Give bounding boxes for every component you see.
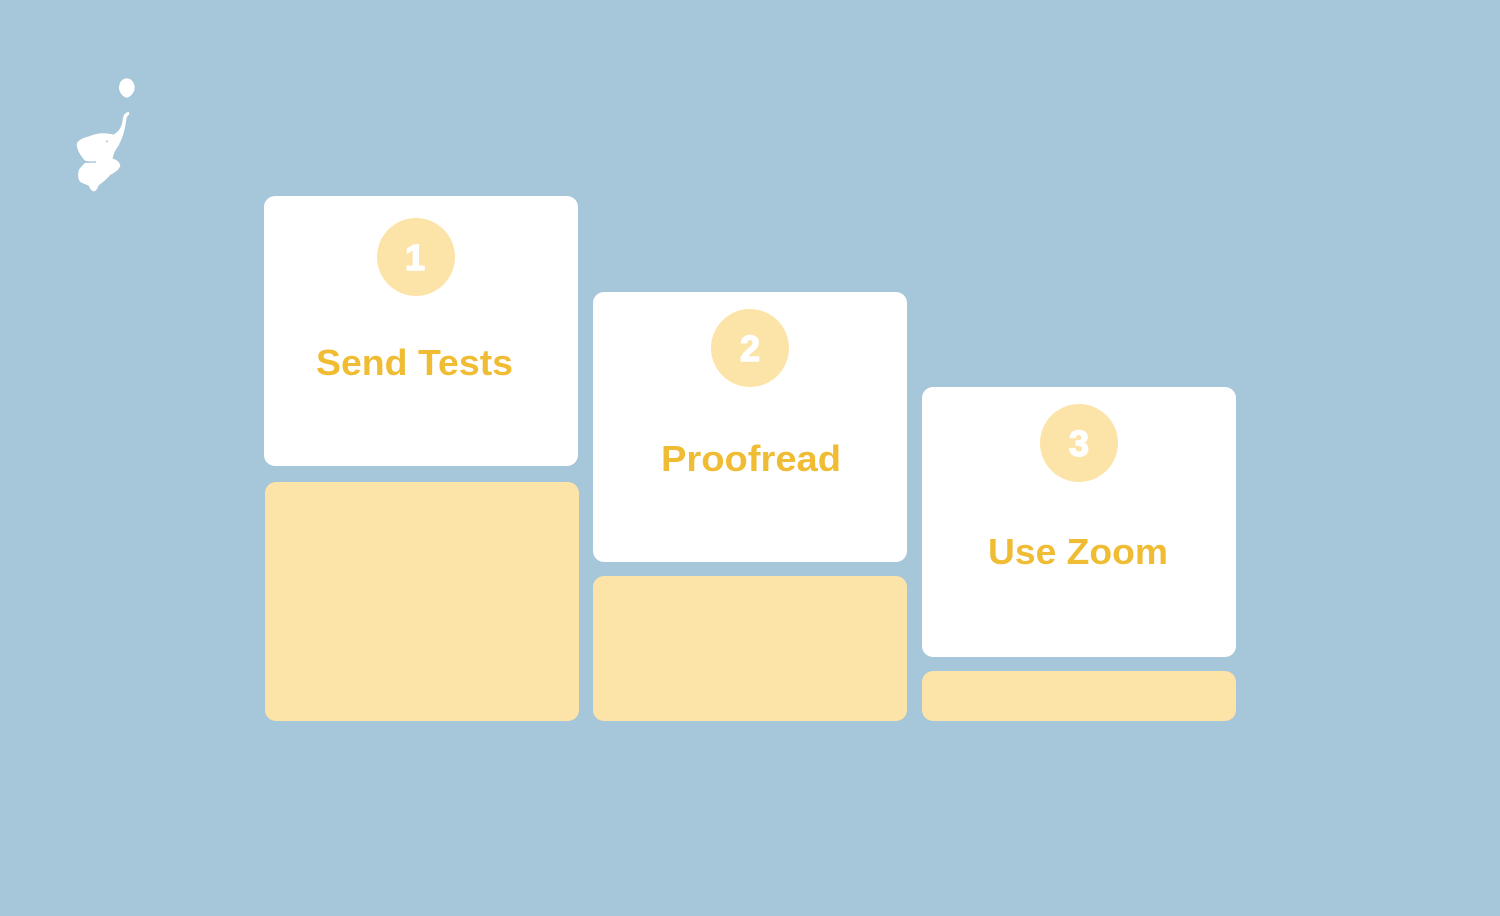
- heading: Send Tests: Send Tests: [316, 342, 513, 383]
- panel: step 2 Proofread: [593, 292, 907, 562]
- panel: step 3 Use Zoom: [922, 387, 1236, 657]
- bar: step 1 base: [265, 482, 579, 721]
- heading: Use Zoom: Use Zoom: [988, 531, 1168, 572]
- heading: Proofread: Proofread: [661, 438, 841, 479]
- badge: number 1: [377, 218, 455, 296]
- badge: number 2: [711, 309, 789, 387]
- panel: step 1 Send Tests: [264, 196, 578, 466]
- bar: step 3 base: [922, 671, 1236, 721]
- badge: number 2: 2: [740, 328, 760, 369]
- badge: number 3: 3: [1069, 423, 1089, 464]
- icon: elephant holding a balloon: [77, 78, 135, 191]
- badge: number 3: [1040, 404, 1118, 482]
- badge: number 1: 1: [405, 237, 425, 278]
- bar: step 2 base: [593, 576, 907, 721]
